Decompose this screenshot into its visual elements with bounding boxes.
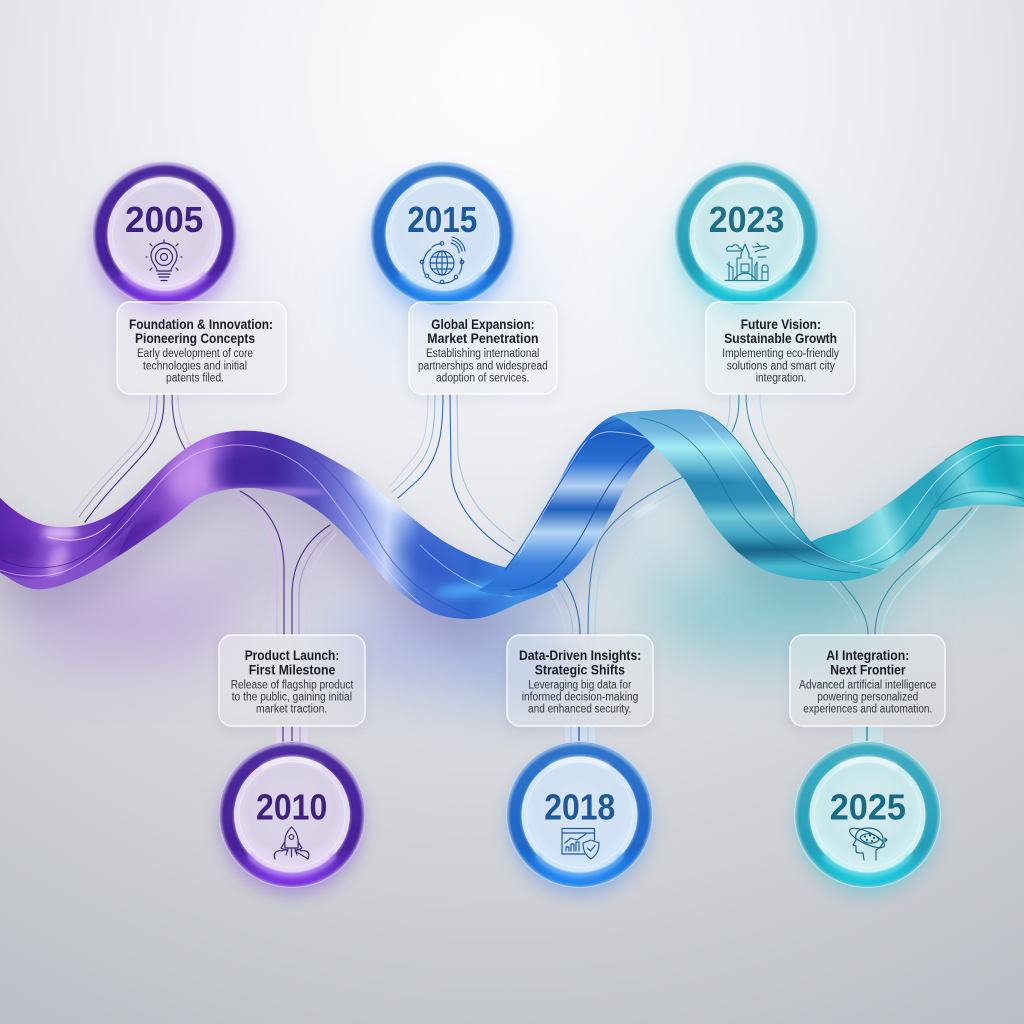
text card: Foundation & Innovation: patents filed. — [166, 372, 224, 384]
connector: 2015 card to ribbon — [389, 394, 514, 555]
text card: Product Launch: First Milestone — [249, 662, 336, 678]
milestone 2005 — [92, 162, 286, 394]
text card: Global Expansion — [409, 302, 557, 394]
glass badge 2005 — [92, 162, 236, 315]
ribbon highlight lines — [0, 445, 512, 615]
text card: Foundation & Innovation: Early development of core — [137, 348, 253, 360]
text card: Future Vision: Sustainable Growth — [724, 331, 837, 346]
text card: Global Expansion: Market Penetration — [427, 331, 539, 346]
text card: AI Integration: experiences and automation. — [803, 704, 932, 716]
glass badge 2010 — [219, 742, 365, 896]
text card: Data-Driven Insights: Leveraging big data for — [528, 680, 631, 692]
text card: Data-Driven Insights: Data-Driven Insights: — [519, 648, 641, 663]
icon: smart city — [725, 243, 769, 280]
text card: Product Launch: to the public, gaining initial — [232, 692, 352, 704]
connector: 2005 card to ribbon — [73, 394, 191, 522]
text card: Data-Driven Insights: informed decision-making — [522, 692, 638, 704]
text card: Product Launch: Product Launch: — [245, 648, 339, 663]
text card: Product Launch: Release of flagship product — [231, 680, 354, 692]
ribbon shadow — [0, 431, 1024, 641]
text card: Future Vision: Implementing eco-friendly — [722, 348, 839, 360]
text card: AI Integration: Next Frontier — [830, 662, 906, 678]
connector: ribbon to 2025 card — [827, 507, 978, 635]
text card: Foundation & Innovation: Foundation & Innovation: — [129, 317, 273, 332]
text card: Global Expansion: partnerships and widespread — [418, 360, 548, 372]
icon: light bulb with gear — [146, 240, 182, 280]
text card: Future Vision: solutions and smart city — [727, 360, 835, 372]
connector stub: 2010 — [276, 726, 308, 744]
connector: ribbon to 2010 card — [237, 491, 336, 635]
text card: Product Launch: market traction. — [256, 704, 327, 716]
year 2018: 2018 — [544, 786, 615, 828]
connector stub: 2025 — [853, 726, 883, 744]
text card: Data-Driven Insights — [507, 635, 653, 726]
year 2025: 2025 — [830, 786, 906, 828]
glass badge 2018 — [506, 742, 652, 896]
milestone 2023 — [674, 162, 855, 394]
year 2023: 2023 — [709, 199, 784, 240]
text card: Future Vision: Future Vision: — [741, 317, 821, 332]
connector: ribbon to 2018 card — [548, 477, 688, 635]
icon: AI head — [847, 825, 887, 860]
text card: Future Vision — [706, 302, 855, 394]
text card: AI Integration — [790, 635, 945, 726]
text card: Foundation & Innovation: Pioneering Concepts — [135, 331, 255, 346]
glass badge 2025 — [794, 742, 940, 896]
milestone 2025 — [790, 635, 945, 896]
text card: Product Launch — [219, 635, 365, 726]
text card: AI Integration: AI Integration: — [826, 648, 909, 663]
icon: dashboard with shield — [562, 828, 599, 859]
ribbon segment: teal rise — [806, 436, 1024, 582]
ribbon — [0, 409, 1024, 619]
icon: rocket — [274, 827, 309, 859]
milestone 2018 — [506, 635, 653, 896]
connector: 2023 card to ribbon — [726, 394, 796, 522]
text card: AI Integration: powering personalized — [817, 692, 918, 704]
coloured ambient glows — [10, 220, 1024, 695]
milestone 2010 — [219, 635, 365, 896]
text card: Data-Driven Insights: Strategic Shifts — [535, 662, 625, 678]
glass badge 2015 — [370, 162, 514, 315]
text card: Global Expansion: Global Expansion: — [431, 317, 535, 332]
text card: AI Integration: Advanced artificial intelligence — [799, 680, 936, 692]
text card: Foundation & Innovation — [117, 302, 286, 394]
ribbon segment: blue rise — [478, 412, 665, 595]
year 2005: 2005 — [125, 199, 203, 240]
glass badge 2023 — [674, 162, 818, 315]
year 2015: 2015 — [407, 199, 477, 240]
milestone 2015 — [370, 162, 557, 394]
text card: Global Expansion: Establishing international — [426, 348, 539, 360]
text card: Data-Driven Insights: and enhanced security. — [528, 704, 631, 716]
ribbon segment: purple to blue — [0, 431, 558, 619]
icon: globe network — [420, 237, 465, 284]
text card: Global Expansion: adoption of services. — [436, 372, 529, 384]
text card: Foundation & Innovation: technologies and initial — [143, 360, 247, 372]
connector stub: 2018 — [565, 726, 595, 744]
year 2010: 2010 — [256, 786, 327, 828]
text card: Future Vision: integration. — [756, 372, 806, 384]
ribbon segment: teal descent — [612, 409, 885, 581]
